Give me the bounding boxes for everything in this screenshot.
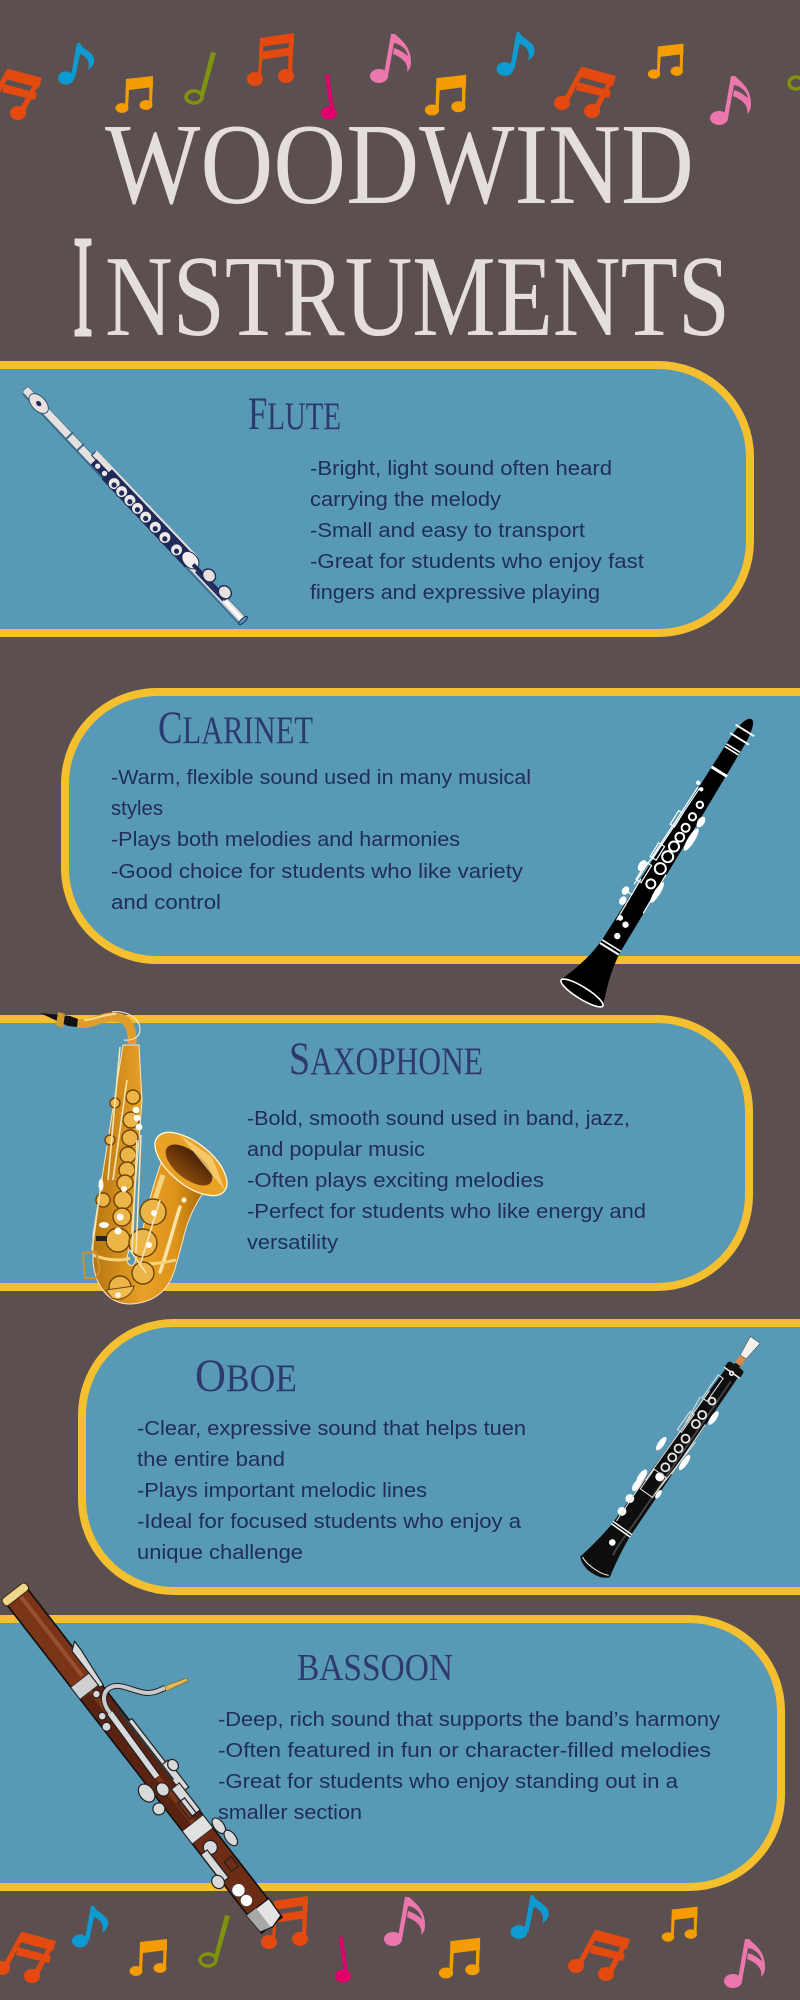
oboe description (137, 1417, 526, 1564)
clarinet heading: CLARINET (158, 702, 313, 754)
oboe description: -Ideal for focused students who enjoy a (137, 1510, 522, 1533)
note: blue eighth (497, 32, 535, 76)
panel: clarinet (65, 692, 800, 1011)
oboe panel background (82, 1323, 800, 1591)
oboe description: -Clear, expressive sound that helps tuen (137, 1417, 526, 1440)
oboe heading: OBOE (195, 1350, 297, 1402)
title (73, 101, 730, 367)
note: magenta quarter (321, 74, 337, 120)
note: blue eighth (72, 1906, 108, 1948)
note: red double beamed (261, 1896, 308, 1949)
flute heading: FLUTE (248, 388, 341, 440)
flute description: -Bright, light sound often heard (310, 457, 612, 480)
oboe description: -Plays important melodic lines (137, 1479, 427, 1502)
icon: flute (20, 381, 253, 627)
panel: oboe (82, 1323, 800, 1591)
note: red double beamed (247, 33, 294, 86)
bassoon description: -Great for students who enjoy standing out in a (218, 1770, 679, 1793)
note: orange beamed large (439, 1938, 480, 1978)
note: olive half partial (789, 77, 800, 89)
bassoon heading: BASSOON (297, 1647, 453, 1689)
bassoon panel background (0, 1619, 781, 1887)
panel: saxophone (0, 1012, 749, 1304)
saxophone description: -Bold, smooth sound used in band, jazz, (247, 1107, 630, 1130)
note: blue eighth (58, 43, 94, 84)
note: blue eighth (511, 1895, 549, 1939)
panel: bassoon (0, 1575, 781, 1942)
saxophone description: and popular music (247, 1138, 425, 1161)
icon: clarinet (558, 706, 773, 1011)
panel: flute (0, 365, 750, 633)
saxophone panel background (0, 1019, 749, 1287)
flute description (310, 457, 644, 604)
note: orange beamed small (662, 1907, 697, 1942)
note: orange beamed (130, 1939, 167, 1976)
icon: saxophone (40, 1012, 238, 1304)
note: olive half (186, 52, 216, 103)
oboe description: the entire band (137, 1448, 285, 1471)
saxophone description (247, 1107, 646, 1254)
icon: oboe (575, 1328, 770, 1583)
bassoon description: -Deep, rich sound that supports the band’s harmony (218, 1708, 721, 1731)
bassoon description: smaller section (218, 1801, 362, 1824)
flute description: -Great for students who enjoy fast (310, 550, 644, 573)
saxophone description: -Perfect for students who like energy and (247, 1200, 646, 1223)
note: red beamed partial (0, 1932, 56, 1983)
flute description: carrying the melody (310, 488, 502, 511)
oboe description: unique challenge (137, 1541, 303, 1564)
note: red beamed partial (0, 69, 42, 120)
note: magenta quarter (335, 1937, 351, 1982)
note: pink sixteenth (370, 34, 411, 83)
note: pink sixteenth (710, 76, 751, 125)
note: red beamed tilted (554, 67, 616, 118)
note: orange beamed (116, 76, 153, 113)
note: orange beamed small (648, 44, 683, 79)
title line two: I (73, 207, 93, 367)
saxophone description: -Often plays exciting melodies (247, 1169, 544, 1192)
flute description: -Small and easy to transport (310, 519, 585, 542)
bassoon description (218, 1708, 721, 1824)
flute panel background (0, 365, 750, 633)
clarinet description: -Plays both melodies and harmonies (111, 828, 460, 851)
saxophone heading: SAXOPHONE (289, 1033, 483, 1085)
note: olive half (200, 1915, 230, 1966)
title line one: WOODWIND (105, 101, 694, 229)
clarinet description (111, 766, 531, 914)
clarinet description: and control (111, 891, 221, 914)
note: pink sixteenth (384, 1897, 425, 1946)
clarinet description: styles (111, 797, 163, 820)
saxophone description: versatility (247, 1231, 339, 1254)
clarinet description: -Good choice for students who like variety (111, 860, 524, 883)
note: pink sixteenth (724, 1939, 765, 1988)
icon: bassoon (0, 1575, 294, 1942)
clarinet panel background (65, 692, 800, 960)
bottom music notes (0, 1895, 765, 1988)
note: red beamed tilted (568, 1930, 630, 1981)
top music notes (0, 32, 800, 125)
flute description: fingers and expressive playing (310, 581, 600, 604)
clarinet description: -Warm, flexible sound used in many musical (111, 766, 531, 789)
bassoon description: -Often featured in fun or character-filled melodies (218, 1739, 711, 1762)
note: orange beamed large (425, 75, 466, 116)
